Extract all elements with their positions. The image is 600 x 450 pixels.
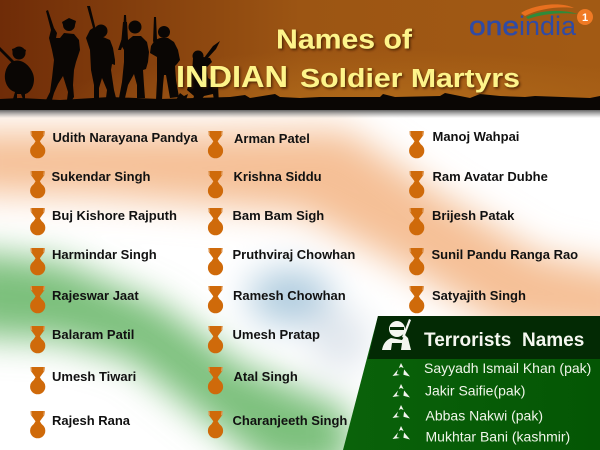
column 1 names: Umesh Tiwari	[52, 369, 136, 384]
logo: oneindia	[469, 4, 593, 41]
column 2 names	[208, 131, 355, 438]
column 1 names: Balaram Patil	[52, 327, 134, 342]
medal	[208, 131, 223, 158]
background: blurred tricolour wash	[0, 110, 600, 450]
heading: Terrorists	[424, 330, 511, 351]
column 2 names: Bam Bam Sigh	[232, 208, 324, 223]
column 3 names: Sunil Pandu Ranga Rao	[432, 247, 578, 262]
soldier: rifle raised 3	[118, 15, 149, 98]
soldier: rifle raised 2	[86, 6, 116, 98]
column 2 names: Atal Singh	[234, 369, 298, 384]
column 1 names: Udith Narayana Pandya	[52, 130, 198, 145]
terrorist list: Mukhtar Bani (kashmir)	[426, 428, 570, 444]
soldier: rifle raised 1	[46, 10, 80, 100]
column 3 names: Ram Avatar Dubhe	[432, 169, 548, 184]
column 2 names: Charanjeeth Singh	[232, 413, 347, 428]
logo: oneindia: one	[469, 11, 519, 41]
column 1 names	[30, 130, 198, 438]
terrorist list: Abbas Nakwi (pak)	[426, 408, 543, 424]
medal	[409, 131, 424, 158]
column 2 names: Pruthviraj Chowhan	[232, 247, 355, 262]
title	[176, 24, 520, 94]
column 2 names: Arman Patel	[234, 131, 310, 146]
title: Soldier Martyrs	[300, 65, 520, 93]
logo: oneindia: india	[519, 11, 577, 41]
column 1 names: Rajeswar Jaat	[52, 288, 139, 303]
column 2 names: Ramesh Chowhan	[233, 288, 346, 303]
column 1 names: Sukendar Singh	[52, 169, 151, 184]
soldiers silhouettes	[0, 6, 220, 106]
bullet icon	[392, 363, 410, 376]
terrorist list: Sayyadh Ismail Khan (pak)	[424, 360, 591, 376]
heading: Names	[522, 330, 584, 351]
terrorist list	[392, 360, 591, 444]
soldier: kneeling left	[0, 46, 34, 99]
title: Names of	[276, 24, 413, 54]
icon: masked gunman	[382, 319, 411, 350]
column 3 names: Brijesh Patak	[432, 208, 515, 223]
title: INDIAN	[176, 60, 288, 94]
column 3 names: Satyajith Singh	[432, 288, 526, 303]
column 2 names: Krishna Siddu	[234, 169, 322, 184]
panel: terrorists names	[343, 316, 600, 450]
terrorist list: Jakir Saifie(pak)	[425, 382, 525, 398]
column 1 names: Harmindar Singh	[52, 247, 157, 262]
column 2 names: Umesh Pratap	[232, 327, 320, 342]
soldier: crouching gunner	[176, 41, 220, 106]
column 1 names: Buj Kishore Rajputh	[52, 208, 177, 223]
column 3 names: Manoj Wahpai	[432, 129, 519, 144]
soldier: rifle raised 4	[150, 17, 180, 100]
logo: oneindia: 1	[582, 12, 588, 24]
header drop shadow	[0, 110, 600, 118]
column 1 names: Rajesh Rana	[52, 413, 131, 428]
column 3 names	[409, 129, 578, 313]
ground silhouette	[0, 93, 600, 110]
medal	[30, 131, 45, 158]
